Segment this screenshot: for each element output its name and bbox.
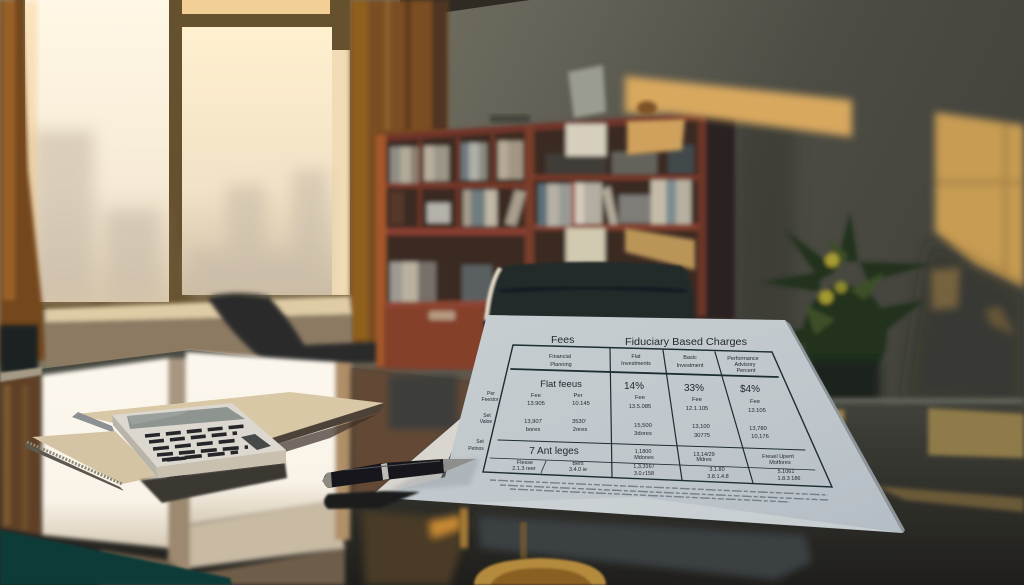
desk reflection: bookcase and warm tones [352,366,475,585]
document text: 15,500 [634,423,652,429]
column headers: Flat [631,354,641,360]
document text: 13,907 [524,419,542,425]
desk reflection: right sunlight [815,398,1024,512]
document text [468,334,828,502]
footnote lines [490,480,828,502]
document text: 5.1061 [778,469,794,475]
row labels: Petnos [468,446,484,452]
document text: 1,3,3167 [633,464,655,470]
document text: 3.0.r158 [634,471,654,477]
books [390,141,694,304]
calculator keys [145,426,248,460]
row labels: Feestor [482,397,499,403]
under-sheet of document [370,412,600,510]
row labels: Set [483,413,491,419]
document text: Flesse [517,460,533,466]
lower row text: 7 Ant leges [529,446,579,457]
document text: 1.8.3 186 [778,476,800,482]
document text: 2.1.3 reer [512,466,536,472]
column headers: Planning [550,362,572,368]
document text: 13,100 [692,424,710,430]
column headers: Advisory [734,362,756,368]
table grid [483,345,832,487]
plant [762,212,1024,410]
document text: 13,780 [749,426,767,432]
heading: fiduciary: Fiduciary Based Charges [625,336,747,348]
document text: 10,176 [751,434,769,440]
pen reflection [324,491,420,509]
document text: 12.1.105 [686,406,708,412]
row labels: Set [476,439,484,445]
document with fee table [370,315,905,533]
document text: Fee [635,395,645,401]
column headers: Percent [737,368,756,374]
teal chair in foreground [0,530,232,585]
document text: $4% [740,384,760,395]
desk reflection: left curtain [0,374,42,535]
column headers: Investment [677,363,704,369]
desk back edge [0,367,42,382]
document text: 10.145 [572,401,590,407]
document text: Fee [692,397,702,403]
column headers [549,354,759,374]
sheet [370,315,903,533]
column headers: Investments [621,361,651,367]
pen [322,459,476,488]
document text: 13.5.085 [629,404,651,410]
fee values: Flat feeus [540,379,582,390]
calculator reflection [140,462,287,503]
document text: 3.8.1.4.8 [707,474,729,480]
document text: 13,14/29 [693,452,715,458]
column headers: Financial [549,354,571,360]
document text: 13.905 [527,401,545,407]
document text: 3.1.80 [709,467,725,473]
paper reflection on desk [478,516,812,580]
cabinet [384,303,485,370]
column headers: Basic [683,355,697,361]
document text: 14% [624,381,644,392]
document text: Mdones [634,455,654,461]
office chair behind document [484,262,694,330]
document text: 3.4.0 ie [569,467,587,473]
document text: 13.105 [748,408,766,414]
document text: 3530' [572,419,586,425]
folder under calculator [72,392,384,452]
curtains [0,0,448,365]
sunlight patches on wall and shelves [490,65,1024,335]
document text: Fee [750,399,760,405]
bookcase [376,113,735,370]
document text: Bers [572,461,584,467]
bowl at bottom [474,522,606,585]
window sill and lower wall [0,296,352,373]
room background wall [0,0,1024,420]
document text: Mdres [696,457,712,463]
column headers: Performance [727,356,759,362]
heading: fees: Fees [551,334,574,346]
document text: 3dores [634,431,652,437]
row labels: Per [487,391,495,397]
side chair near window [208,292,388,366]
row labels: Valoe [480,419,492,425]
glass desk [0,350,1024,585]
document text: 30775 [694,433,710,439]
document text: Per [573,393,583,399]
document text: bores [526,427,540,433]
document text: Motfores [769,460,791,466]
document text: Fee [531,393,541,399]
window with city view [15,0,350,310]
spiral notebook [25,431,160,491]
row labels [468,391,499,452]
document text: 2ores [573,427,587,433]
calculator [112,403,286,478]
document text: 1,1800 [635,449,651,455]
document text: Freuel Upent [762,454,794,460]
document text: 33% [684,383,704,394]
desk reflection: bright window [42,352,352,585]
